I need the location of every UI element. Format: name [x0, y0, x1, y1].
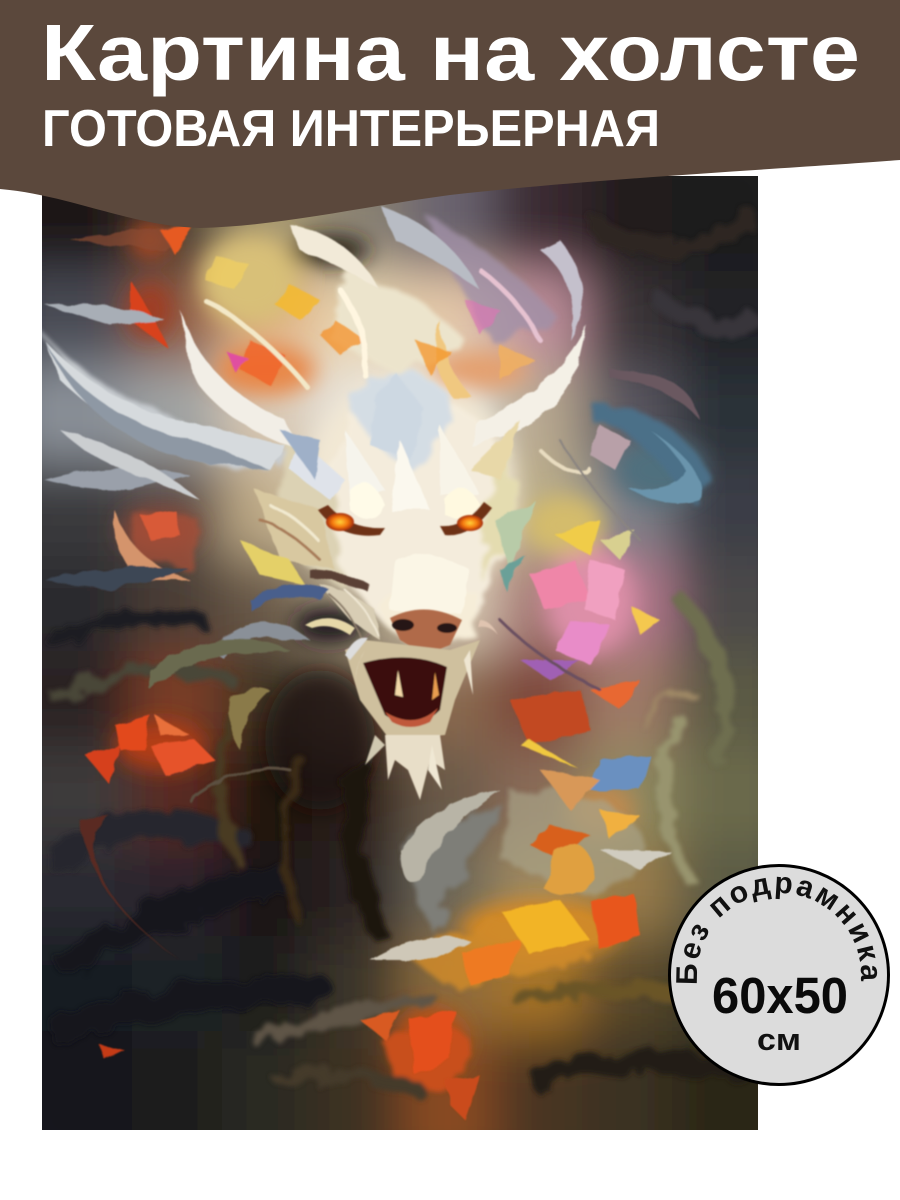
chin fangs	[385, 735, 445, 800]
head spikes	[370, 374, 398, 451]
badge unit: см	[757, 1022, 801, 1057]
snout shading	[390, 554, 470, 615]
right-side petals	[530, 560, 590, 610]
background colour masses	[42, 176, 758, 1130]
upper mane strokes	[290, 225, 380, 290]
whisker strokes left of jaw	[210, 622, 310, 660]
face details	[305, 502, 498, 800]
mid painted masses	[115, 222, 705, 1072]
lower orange and yellow leaves	[500, 900, 590, 955]
fine mane and cheek lines	[190, 270, 640, 800]
badge arc text: Без подрамника	[676, 876, 878, 984]
header banner	[0, 0, 900, 228]
badge size: 60x50	[712, 967, 848, 1024]
jaw and mouth	[345, 640, 480, 740]
size badge	[668, 864, 890, 1086]
brush strokes	[40, 220, 750, 1090]
blue swirl	[610, 370, 700, 420]
painting: white dragon	[42, 176, 758, 1130]
dark and warm body brush lines	[55, 220, 750, 1090]
horns	[44, 340, 285, 470]
subtitle: ГОТОВАЯ ИНТЕРЬЕРНАЯ	[42, 100, 660, 158]
nose	[390, 609, 462, 655]
title: Картина на холсте	[41, 8, 860, 97]
orange leaves left	[115, 715, 150, 750]
crisp detail strokes	[44, 205, 701, 1120]
eyes	[318, 505, 385, 536]
